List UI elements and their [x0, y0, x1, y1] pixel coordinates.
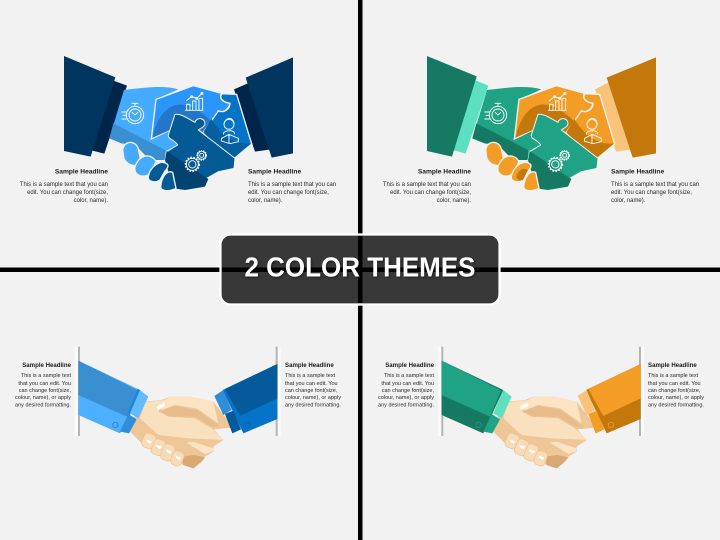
icon: chart: [185, 92, 203, 110]
text block: blue sleeves right: [285, 362, 341, 408]
text block: blue sleeves left: any desired formatting.: [15, 402, 71, 408]
right sleeve: [246, 57, 293, 158]
banner: 2 color themes: 2 COLOR THEMES: [244, 252, 476, 282]
panel: blue sleeves handshake: [75, 347, 281, 468]
fingers: [486, 142, 539, 191]
text block: blue puzzle right: edit. You can change font(size,: [248, 190, 329, 196]
left sleeve: [427, 56, 477, 157]
left sleeve: [78, 361, 141, 433]
text block: blue sleeves left: [15, 362, 72, 408]
text block: orange puzzle right: Sample Headline: [611, 168, 664, 176]
left cuff: [87, 80, 127, 154]
text block: green puzzle left: [383, 168, 471, 204]
icon: stopwatch: [484, 103, 507, 124]
text block: green puzzle left: edit. You can change font(size,: [390, 190, 471, 196]
right cuff: [595, 80, 636, 152]
right sleeve: [607, 57, 656, 158]
text block: orange sleeves right: This is a sample text: [648, 373, 699, 379]
finger shading: [516, 169, 528, 180]
fingers: [123, 142, 176, 191]
text block: blue sleeves right: This is a sample text: [285, 373, 336, 379]
text block: blue puzzle left: Sample Headline: [55, 168, 108, 176]
text block: blue puzzle left: color, name).: [74, 198, 108, 204]
banner: 2 color themes: [220, 234, 500, 304]
text block: orange sleeves right: that you can edit. You: [648, 381, 701, 387]
right hand side shade: [203, 119, 251, 158]
left palm: [109, 87, 178, 160]
text block: blue sleeves left: that you can edit. You: [18, 381, 71, 387]
text block: blue sleeves left: Sample Headline: [22, 362, 72, 369]
text block: orange sleeves right: any desired formatting.: [648, 402, 704, 408]
text block: orange puzzle right: [611, 168, 699, 204]
right hand fold: [153, 105, 213, 138]
icon: stopwatch: [121, 103, 144, 124]
centre puzzle hand: [165, 114, 235, 190]
left sleeve: [442, 361, 503, 433]
right hand fold: [516, 105, 576, 138]
icon: person with box: [221, 118, 238, 144]
text block: blue puzzle right: Sample Headline: [248, 168, 301, 176]
text block: orange sleeves right: colour, name), or apply: [648, 395, 704, 401]
text block: green puzzle left: This is a sample text that you can: [383, 182, 471, 188]
text block: green sleeves left: This is a sample text: [384, 373, 434, 379]
text block: green sleeves left: can change font(size,: [382, 388, 434, 394]
text block: blue sleeves left: colour, name), or apply: [15, 395, 71, 401]
text block: green sleeves left: [378, 362, 435, 408]
icon: gears: [185, 151, 206, 171]
right hand side piece: [566, 94, 615, 158]
right sleeve: [223, 364, 277, 433]
text block: blue sleeves left: This is a sample text: [21, 373, 71, 379]
text block: orange sleeves right: [648, 362, 704, 408]
panel: blue puzzle handshake: [64, 56, 293, 191]
right cuff: [578, 390, 604, 433]
icon: person with box: [584, 118, 601, 144]
left divider: [438, 347, 443, 436]
centre hand shade: [165, 151, 208, 190]
right cuff: [214, 390, 241, 433]
left cuff: [450, 80, 488, 154]
text block: orange sleeves right: Sample Headline: [648, 362, 697, 369]
icon: gears: [548, 151, 569, 171]
clasped hands: [490, 397, 597, 468]
left cuff: [483, 390, 512, 433]
text block: blue puzzle left: edit. You can change font(size,: [27, 190, 108, 196]
text block: blue puzzle right: [248, 168, 336, 204]
text block: green sleeves left: colour, name), or apply: [378, 395, 434, 401]
right sleeve: [586, 364, 641, 433]
centre hand shade: [528, 151, 571, 190]
left palm shade band: [109, 123, 165, 160]
right hand side shade: [566, 119, 614, 158]
left palm: [472, 87, 541, 160]
panel: green orange puzzle handshake: [427, 56, 656, 191]
left cuff: [120, 390, 148, 433]
panel: green orange sleeves handshake: [438, 347, 644, 468]
right hand upper piece: [514, 86, 593, 139]
text block: blue puzzle right: This is a sample text that you can: [248, 182, 336, 188]
text block: orange sleeves right: can change font(size,: [648, 388, 701, 394]
left palm shade band: [472, 123, 528, 160]
text block: orange puzzle right: This is a sample text that you can: [611, 182, 699, 188]
icon: chart: [548, 92, 566, 110]
text block: green puzzle left: color, name).: [437, 198, 471, 204]
text block: orange puzzle right: color, name).: [611, 198, 646, 204]
text block: blue puzzle left: [20, 168, 108, 204]
text block: blue sleeves right: any desired formatting.: [285, 402, 341, 408]
text block: blue sleeves right: colour, name), or apply: [285, 395, 341, 401]
left sleeve: [64, 56, 115, 157]
centre puzzle hand: [528, 114, 598, 190]
right hand upper piece: [151, 86, 230, 139]
text block: blue sleeves right: that you can edit. You: [285, 381, 338, 387]
right divider: [639, 347, 644, 436]
right cuff: [234, 82, 273, 152]
right hand side piece: [203, 94, 252, 158]
text block: green sleeves left: Sample Headline: [385, 362, 435, 369]
text block: blue puzzle right: color, name).: [248, 198, 283, 204]
text block: green sleeves left: that you can edit. You: [381, 381, 434, 387]
text block: orange puzzle right: edit. You can change font(size,: [611, 190, 692, 196]
text block: green sleeves left: any desired formatting.: [378, 402, 434, 408]
clasped hands: [127, 397, 233, 468]
text block: blue sleeves right: can change font(size,: [285, 388, 338, 394]
text block: blue sleeves left: can change font(size,: [19, 388, 71, 394]
right divider: [276, 347, 281, 436]
text block: green puzzle left: Sample Headline: [418, 168, 471, 176]
left divider: [75, 347, 80, 436]
text block: blue puzzle left: This is a sample text that you can: [20, 182, 108, 188]
text block: blue sleeves right: Sample Headline: [285, 362, 334, 369]
